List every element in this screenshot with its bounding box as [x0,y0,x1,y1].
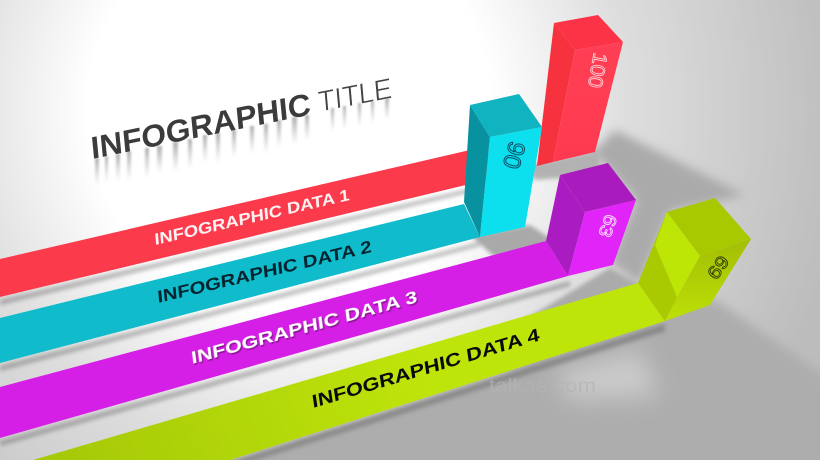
title [89,73,393,185]
panel: data 4 lime [33,198,751,460]
cast shadows [200,130,820,460]
value: 100: 100 [583,51,611,89]
title bold word: INFOGRAPHIC [89,86,312,166]
title light word: TITLE [317,73,393,119]
panel: data 2 cyan [0,94,542,363]
watermark: talkae.com [489,376,596,397]
panel: data 1 red [0,15,623,297]
red bar [0,150,537,297]
cyan box [464,94,542,237]
purple bar [0,241,568,438]
purple box [546,163,636,276]
label: data 2: INFOGRAPHIC DATA 2 [157,237,372,307]
panel: data 3 purple [0,163,636,438]
value: 69: 69 [703,252,733,283]
bar shadows [0,186,665,460]
value: 63: 63 [594,212,621,240]
label: data 1: INFOGRAPHIC DATA 1 [154,186,350,249]
label: data 3: INFOGRAPHIC DATA 3 [190,287,418,368]
title reflection [95,98,389,185]
lime box [638,198,751,321]
lime bar [33,283,665,460]
cyan bar [0,204,480,363]
value: 90: 90 [497,138,530,172]
label: data 4: INFOGRAPHIC DATA 4 [311,324,541,412]
red box [537,15,623,166]
